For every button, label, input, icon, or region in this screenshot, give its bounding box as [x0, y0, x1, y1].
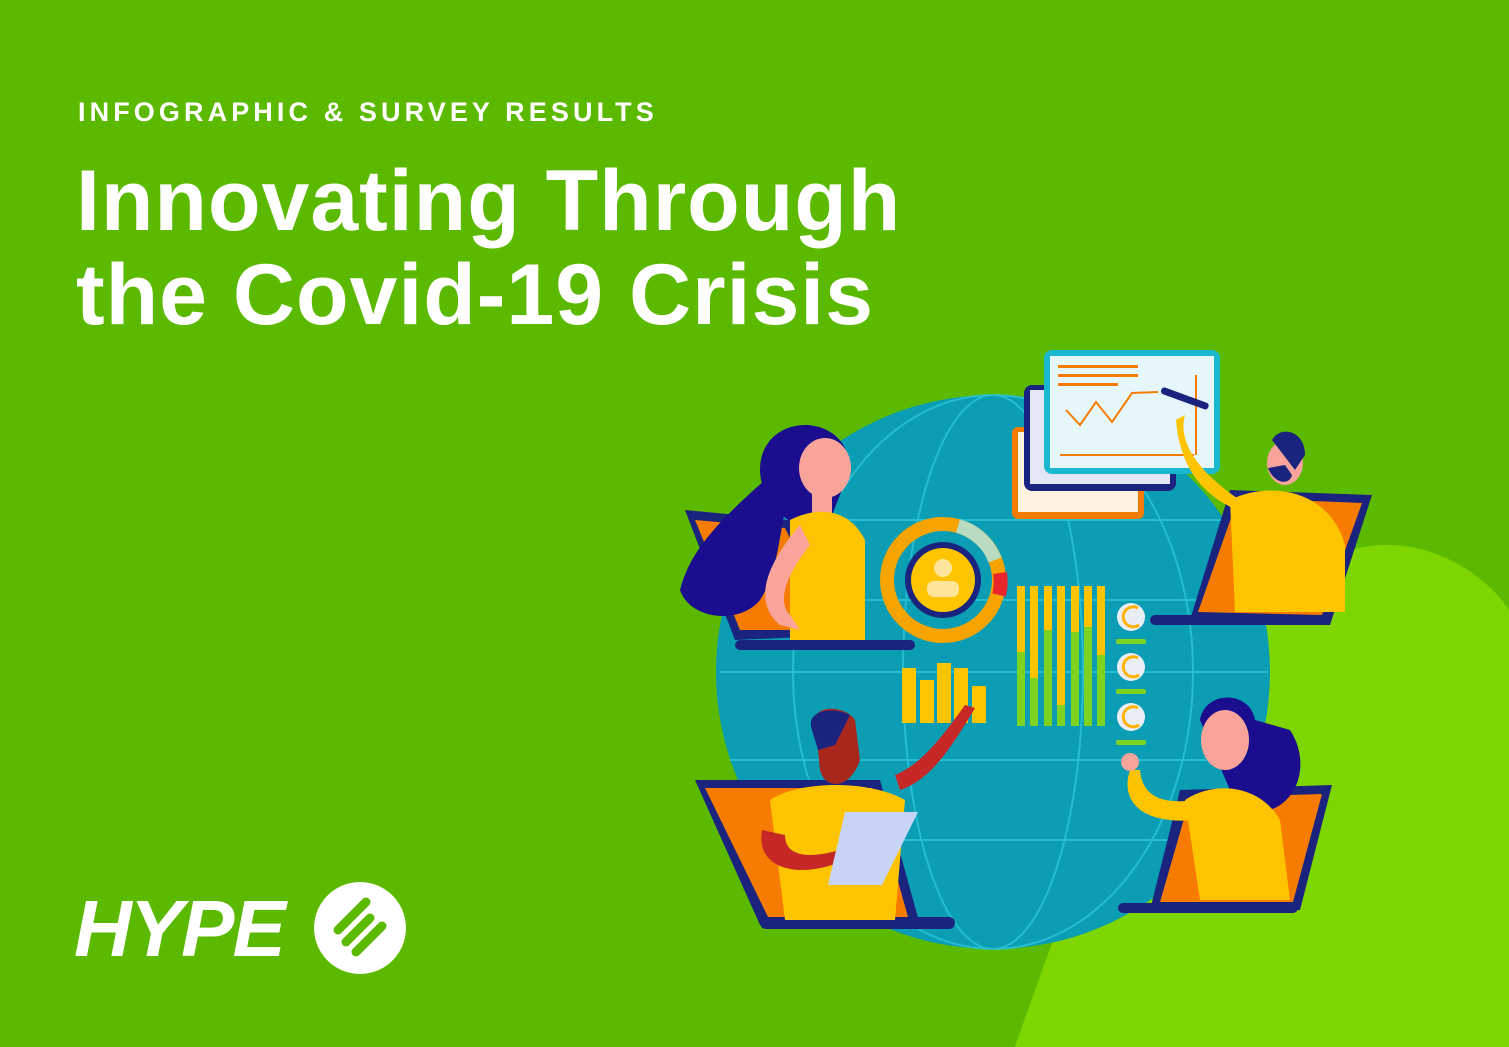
bar chart small — [902, 663, 986, 723]
person bottom-right — [1118, 698, 1332, 913]
checklist — [1116, 603, 1146, 745]
title: the Covid-19 Crisis — [76, 247, 874, 343]
logo: HYPE: HYPE — [74, 884, 284, 973]
light green blob — [1015, 545, 1509, 1047]
whiteboards — [1012, 350, 1220, 519]
globe — [716, 395, 1270, 949]
person bottom-left — [695, 705, 975, 929]
subtitle: INFOGRAPHIC & SURVEY RESULTS — [78, 97, 658, 127]
donut chart — [887, 524, 1001, 636]
title: Innovating Through — [76, 153, 901, 249]
icon: logo circle — [314, 882, 406, 974]
logo: HYPE — [74, 882, 406, 974]
person top-right — [1150, 387, 1372, 625]
person top-left — [680, 425, 915, 650]
title — [76, 153, 901, 343]
bar chart tall — [1017, 586, 1105, 726]
